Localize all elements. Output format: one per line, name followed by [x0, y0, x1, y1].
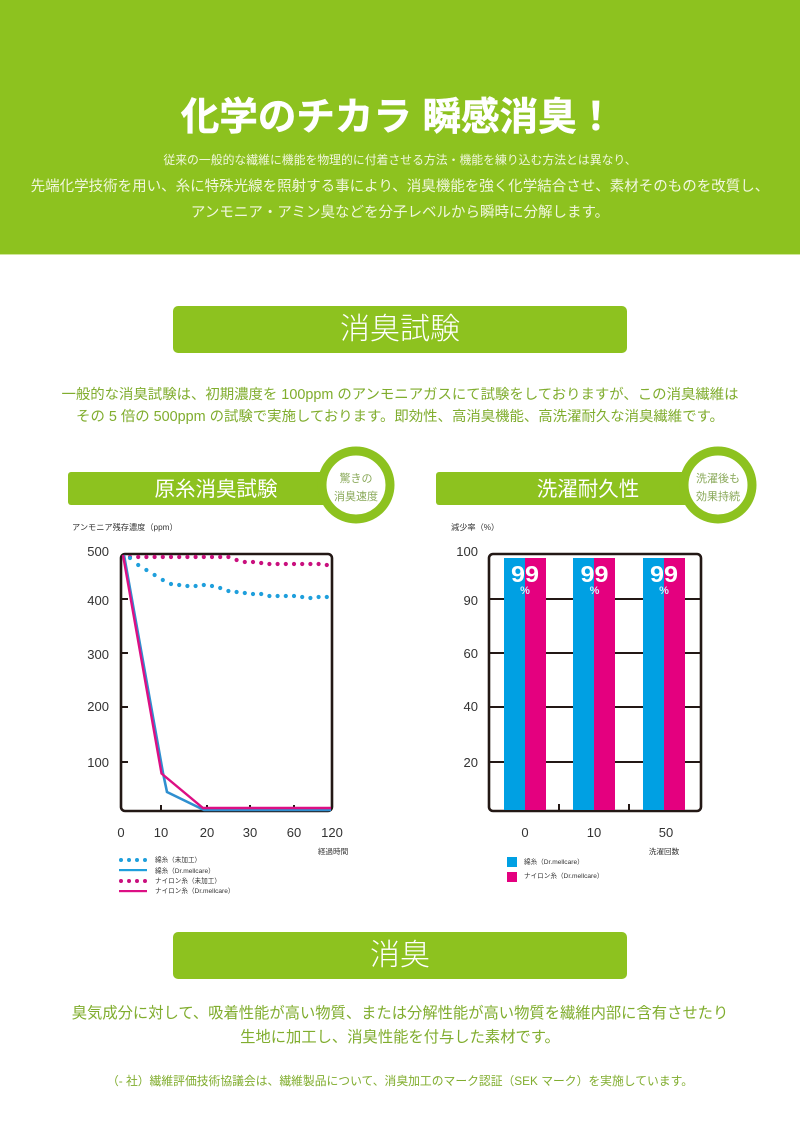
x axis labels: 10 [154, 825, 168, 840]
heading: deodorant test [173, 306, 627, 353]
x axis labels: 50 [659, 825, 673, 840]
subheading bar: yarn test: 原糸消臭試験 [154, 478, 278, 501]
line chart legend: 綿糸（未加工） [155, 855, 201, 864]
series: nylon untreated [128, 555, 329, 567]
value labels: % [520, 585, 530, 597]
line chart legend [119, 855, 234, 895]
test description text: 一般的な消臭試験は、初期濃度を 100ppm のアンモニアガスにて試験をしておりますが、この消臭繊維は [61, 387, 739, 403]
series: nylon treated [123, 555, 331, 808]
bar chart [456, 544, 701, 856]
bar chart legend: ナイロン糸（Dr.mellcare） [524, 871, 604, 880]
intro text [31, 153, 769, 221]
title: 化学のチカラ 瞬感消臭！ [181, 96, 615, 139]
panel: yarn deodorant test [68, 451, 390, 895]
test description text: その 5 倍の 500ppm の試験で実施しております。即効性、高消臭機能、高洗濯耐久な消臭繊維です。 [76, 409, 724, 425]
series: cotton treated [124, 555, 331, 810]
chart frame and ticks [121, 554, 332, 811]
series: cotton untreated [128, 556, 329, 600]
deodorant description text [72, 1004, 728, 1046]
heading: deodorant: 消臭 [370, 939, 430, 972]
y axis labels: 60 [464, 646, 478, 661]
bars: washes 0 [504, 558, 546, 810]
header band [0, 0, 800, 255]
y axis labels: 100 [456, 544, 478, 559]
badge: surprising speed [322, 451, 390, 519]
y axis labels: 400 [87, 593, 109, 608]
y axis labels [87, 544, 109, 770]
x axis labels: 10 [587, 825, 601, 840]
heading: deodorant test: 消臭試験 [340, 313, 460, 346]
x axis title: 洗濯回数 [649, 846, 680, 856]
intro text: アンモニア・アミン臭などを分子レベルから瞬時に分解します。 [191, 205, 609, 221]
subheading bar: wash durability: 洗濯耐久性 [537, 478, 639, 501]
value labels: 99 [650, 561, 678, 587]
y axis labels [456, 544, 478, 770]
value labels: % [659, 585, 669, 597]
subheading bar: wash durability [436, 472, 701, 505]
value labels: 99 [511, 561, 539, 587]
deodorant description text: 臭気成分に対して、吸着性能が高い物質、または分解性能が高い物質を繊維内部に含有させたり [72, 1005, 728, 1022]
y axis labels: 100 [87, 755, 109, 770]
x axis labels: 120 [321, 825, 343, 840]
intro text: 先端化学技術を用い、糸に特殊光線を照射する事により、消臭機能を強く化学結合させ、素材そのものを改質し、 [31, 179, 769, 195]
y axis title: 減少率（%） [451, 522, 499, 532]
x axis labels: 30 [243, 825, 257, 840]
x axis labels [117, 825, 343, 840]
y axis labels: 300 [87, 647, 109, 662]
badge: surprising speed: 消臭速度 [334, 489, 378, 503]
deodorant description text: 生地に加工し、消臭性能を付与した素材です。 [240, 1029, 560, 1046]
line chart legend: ナイロン糸（Dr.mellcare） [155, 886, 234, 895]
y axis labels: 40 [464, 699, 478, 714]
badge: surprising speed: 驚きの [340, 471, 372, 485]
badge: lasting effect [684, 451, 752, 519]
badge: lasting effect: 洗濯後も [696, 471, 740, 485]
subheading bar: yarn test [68, 472, 338, 505]
test description text [61, 386, 739, 425]
bars: washes 10 [573, 558, 615, 810]
line chart legend: ナイロン糸（未加工） [155, 876, 221, 885]
bar chart legend: 綿糸（Dr.mellcare） [524, 857, 584, 866]
x axis labels: 20 [200, 825, 214, 840]
x axis title: 経過時間 [318, 846, 348, 856]
x axis labels: 60 [287, 825, 301, 840]
y axis labels: 90 [464, 593, 478, 608]
heading: deodorant [173, 932, 627, 979]
x axis labels: 0 [521, 825, 529, 840]
y axis title: アンモニア残存濃度（ppm） [72, 522, 178, 532]
x axis labels [521, 825, 673, 840]
footnote: （- 社）繊維評価技術協議会は、繊維製品について、消臭加工のマーク認証（SEK マーク）を実施しています。 [107, 1074, 693, 1088]
badge: lasting effect: 効果持続 [696, 489, 740, 503]
y axis labels: 20 [464, 755, 478, 770]
y axis labels: 200 [87, 699, 109, 714]
line chart [87, 544, 348, 856]
value labels: % [590, 585, 600, 597]
y axis labels: 500 [87, 544, 109, 559]
value labels [511, 561, 678, 597]
intro text: 従来の一般的な繊維に機能を物理的に付着させる方法・機能を練り込む方法とは異なり、 [163, 153, 637, 167]
bar chart legend [507, 857, 604, 882]
panel: wash durability [436, 451, 752, 882]
chart frame and grid [489, 554, 701, 811]
line chart legend: 綿糸（Dr.mellcare） [155, 866, 215, 875]
x axis labels: 0 [117, 825, 125, 840]
value labels: 99 [580, 561, 608, 587]
bars: washes 50 [643, 558, 685, 810]
